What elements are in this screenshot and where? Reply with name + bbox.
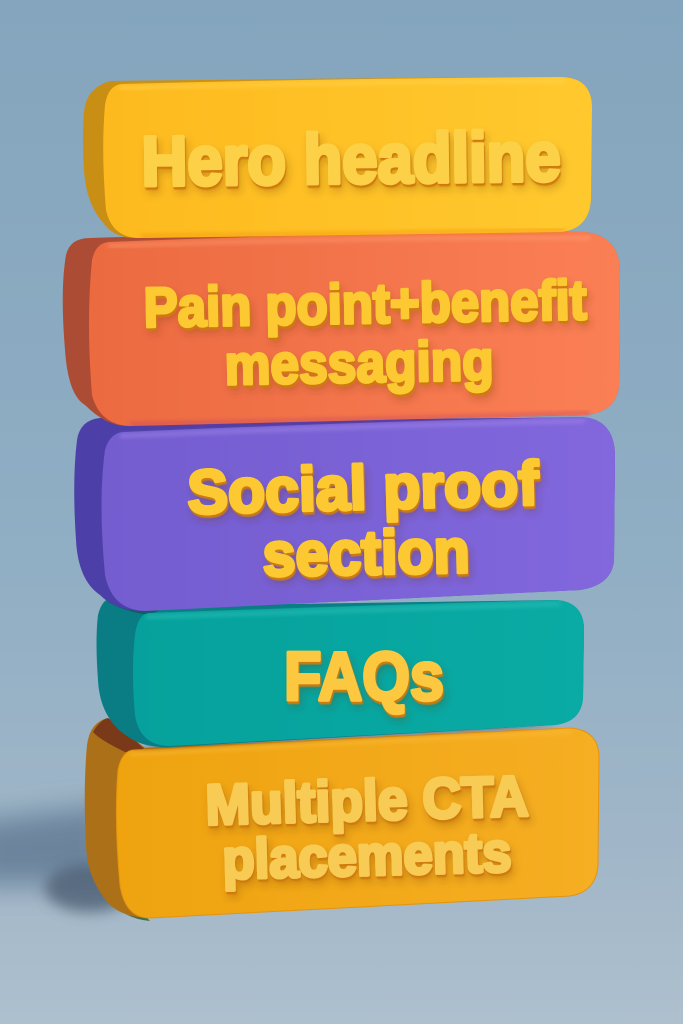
label: Multiple CTA placements [205, 764, 529, 891]
label: Hero headline: Hero headline [141, 117, 561, 201]
block: pain point + benefit messaging [63, 232, 620, 426]
label: Pain point + benefit messaging [143, 268, 587, 396]
label: Pain point + benefit messaging: messaging [224, 329, 494, 396]
block: multiple CTA placements [85, 718, 599, 921]
label: Social proof section [187, 449, 540, 590]
block: hero headline [83, 77, 592, 238]
floor shadow [0, 805, 135, 912]
label: Multiple CTA placements: Multiple CTA [205, 764, 529, 837]
label: FAQs: FAQs [284, 638, 444, 715]
label: Pain point + benefit messaging: Pain point+benefit [143, 268, 587, 339]
label: Social proof section: Social proof [187, 449, 540, 528]
label: Social proof section: section [262, 517, 470, 590]
block: FAQs [96, 596, 584, 750]
block: social proof section [74, 417, 615, 611]
label: Multiple CTA placements: placements [222, 820, 512, 891]
